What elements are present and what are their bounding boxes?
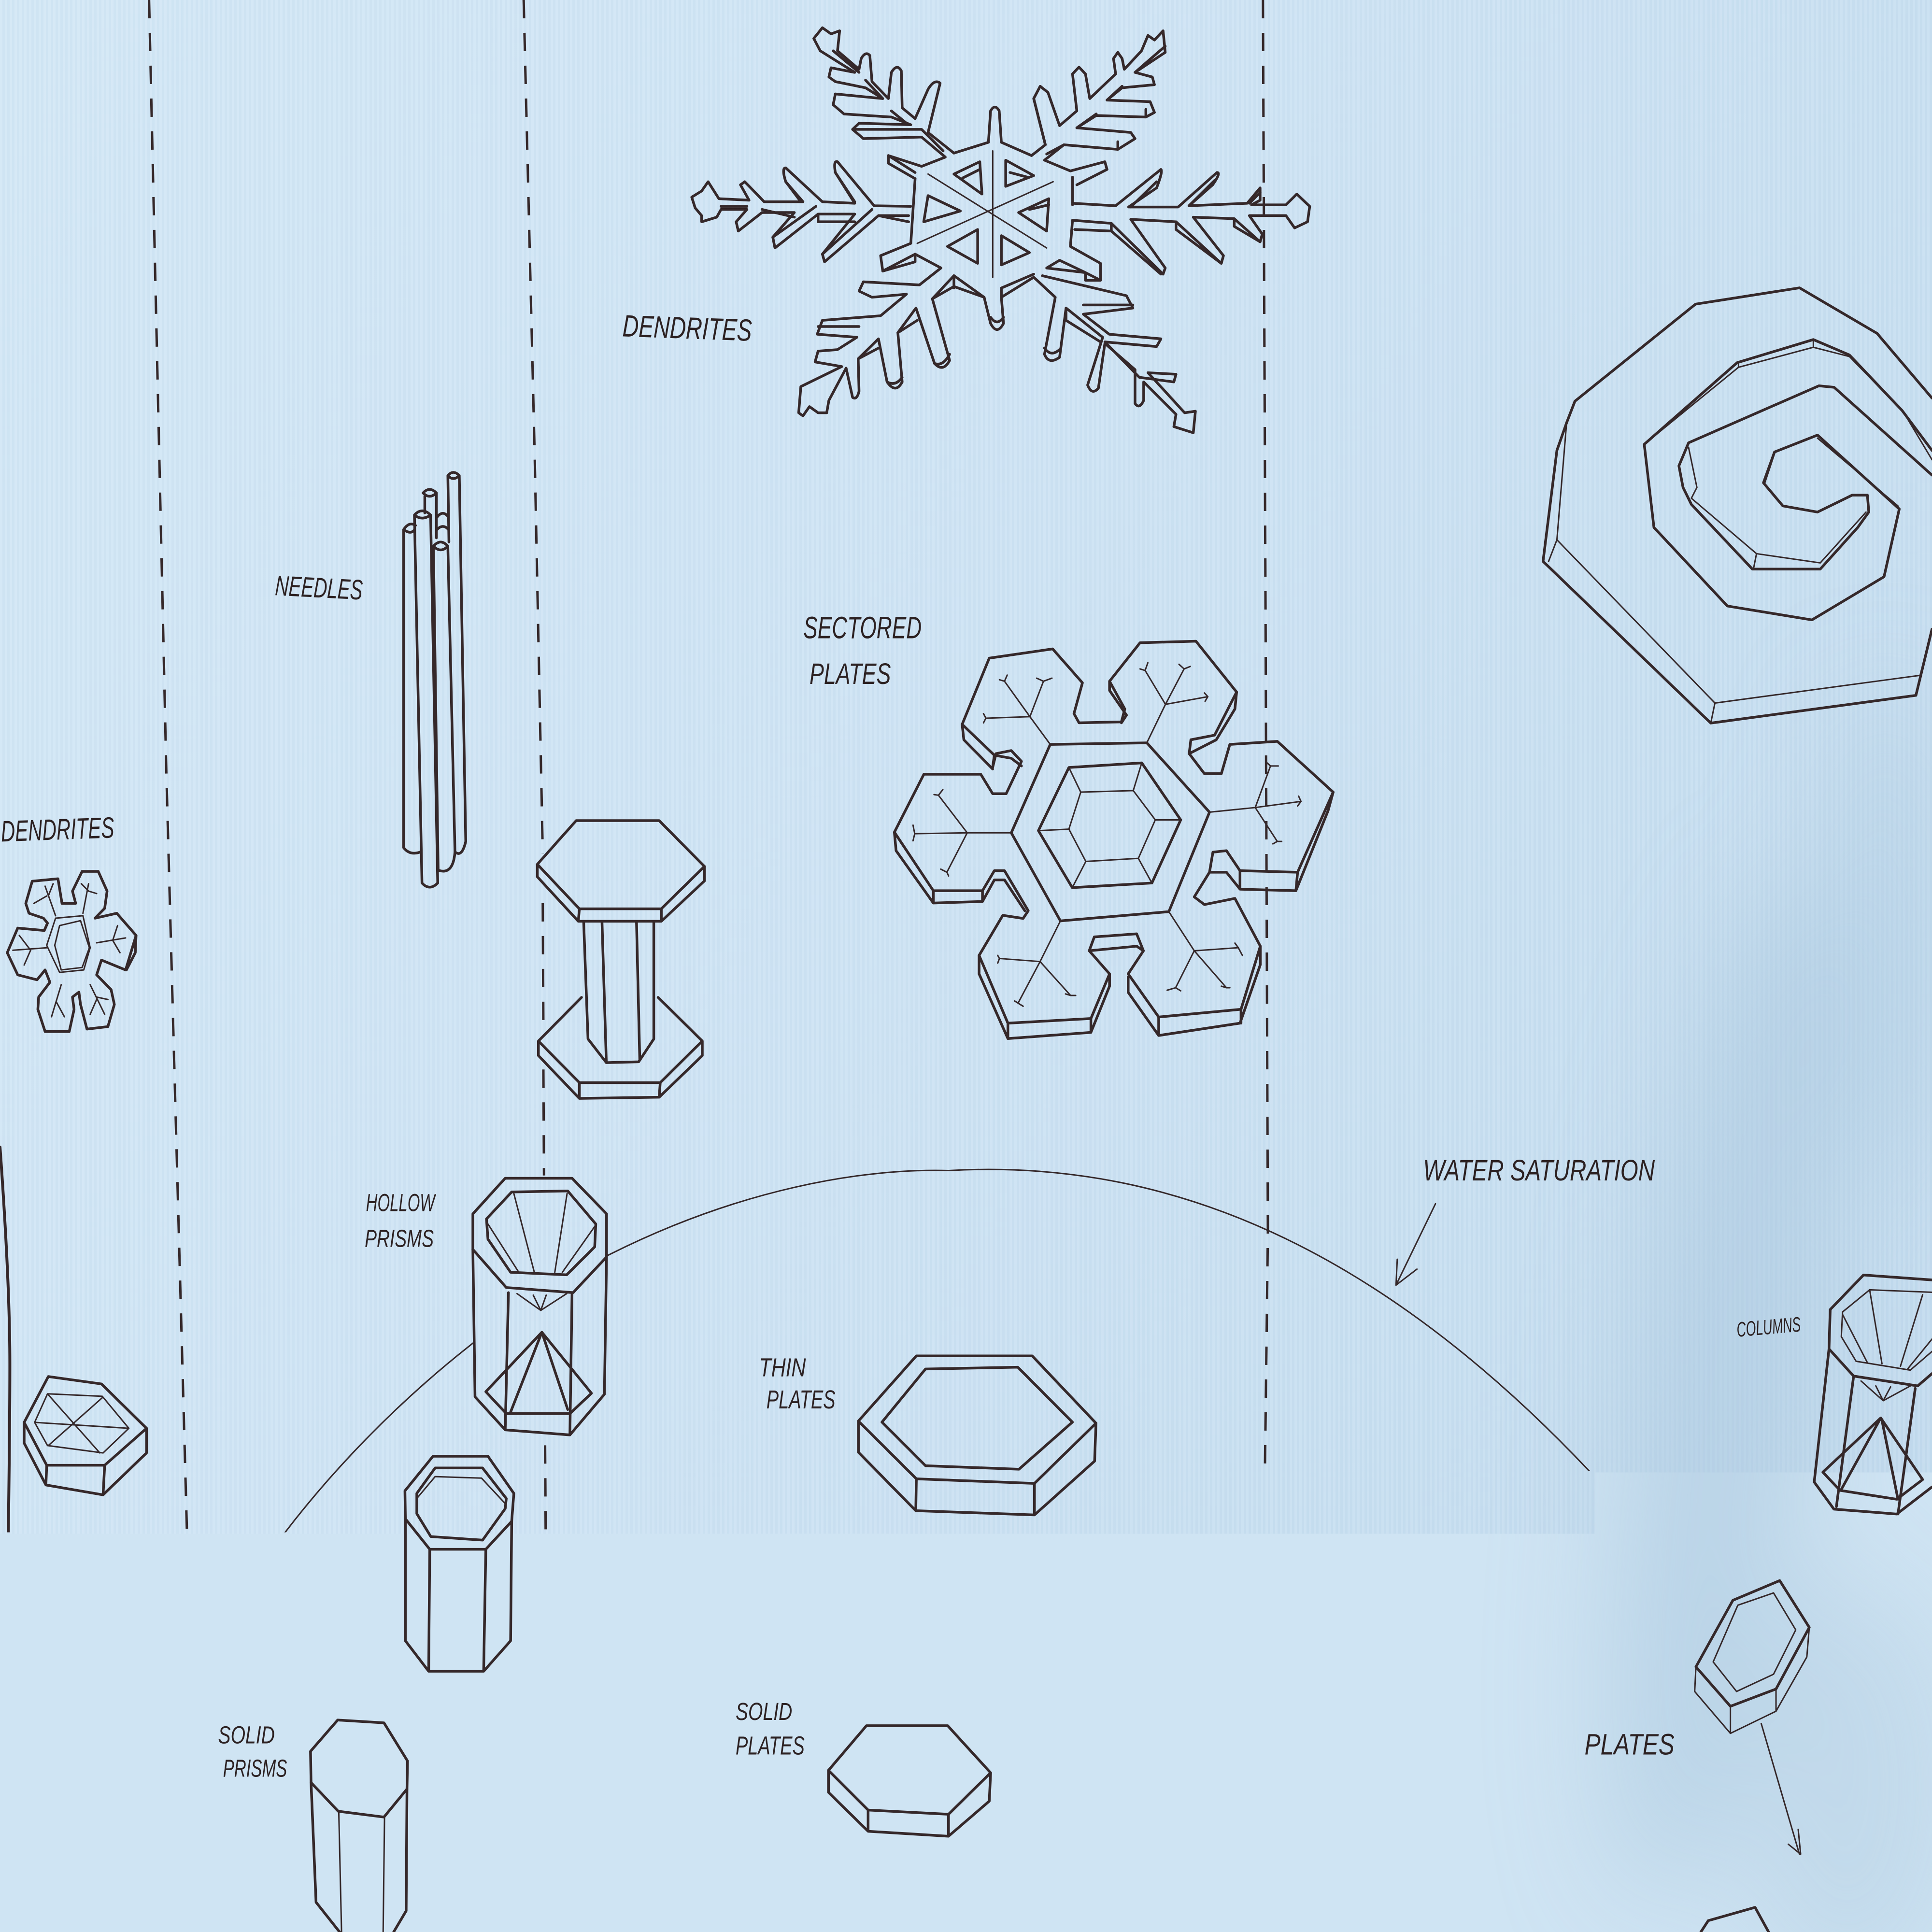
left edge stroke xyxy=(0,1147,133,1932)
label: dendrites: DENDRITES xyxy=(622,308,753,348)
icon: spiral crystal xyxy=(1543,288,1932,723)
fabric shading xyxy=(1562,690,1932,1932)
label: solid plates xyxy=(736,1698,805,1761)
icon: left hex plate xyxy=(24,1377,146,1495)
label: solid plates: PLATES xyxy=(736,1732,805,1761)
label: solid plates: SOLID xyxy=(736,1698,792,1725)
label: sectored plates: PLATES xyxy=(810,657,891,690)
label: columns: COLUMNS xyxy=(1736,1313,1802,1342)
icon: capped column xyxy=(537,821,704,1098)
icon: needles xyxy=(404,472,466,887)
label: hollow prisms: HOLLOW xyxy=(366,1189,437,1217)
icon: hollow prism xyxy=(473,1178,607,1435)
icon: open prism xyxy=(405,1456,514,1671)
label: water saturation: WATER SATURATION xyxy=(1423,1154,1655,1187)
label: thin plates: THIN xyxy=(759,1353,806,1382)
label: needles: NEEDLES xyxy=(274,570,363,606)
label: sectored plates: SECTORED xyxy=(803,610,922,645)
icon: solid plate xyxy=(828,1726,991,1836)
arrow: water saturation pointer xyxy=(1396,1204,1435,1285)
label: solid prisms: SOLID xyxy=(218,1721,275,1749)
label: hollow prisms xyxy=(365,1189,437,1252)
icon: solid prism xyxy=(311,1720,408,1932)
label: thin plates xyxy=(759,1353,836,1414)
dashed divider lines xyxy=(149,0,1268,1932)
label: sectored plates xyxy=(803,610,922,690)
label: thin plates: PLATES xyxy=(767,1386,836,1414)
label: hollow prisms: PRISMS xyxy=(365,1225,434,1252)
icon: small dendrite xyxy=(7,871,136,1032)
label: solid prisms xyxy=(218,1721,287,1782)
icon: right hex plate xyxy=(1695,1580,1809,1733)
icon: dendrite snowflake xyxy=(692,28,1310,433)
icon: sectored plate xyxy=(895,641,1333,1038)
label: solid prisms: PRISMS xyxy=(223,1755,287,1782)
icon: partial crystal bottom right xyxy=(1701,1907,1769,1932)
arrow: plates continuation xyxy=(1761,1723,1801,1854)
icon: thin plate xyxy=(858,1356,1096,1515)
label: plates right: PLATES xyxy=(1585,1728,1675,1761)
water saturation curve xyxy=(64,1169,1715,1932)
icon: right column crystal xyxy=(1814,1275,1932,1514)
label: dendrites left: DENDRITES xyxy=(0,811,115,848)
